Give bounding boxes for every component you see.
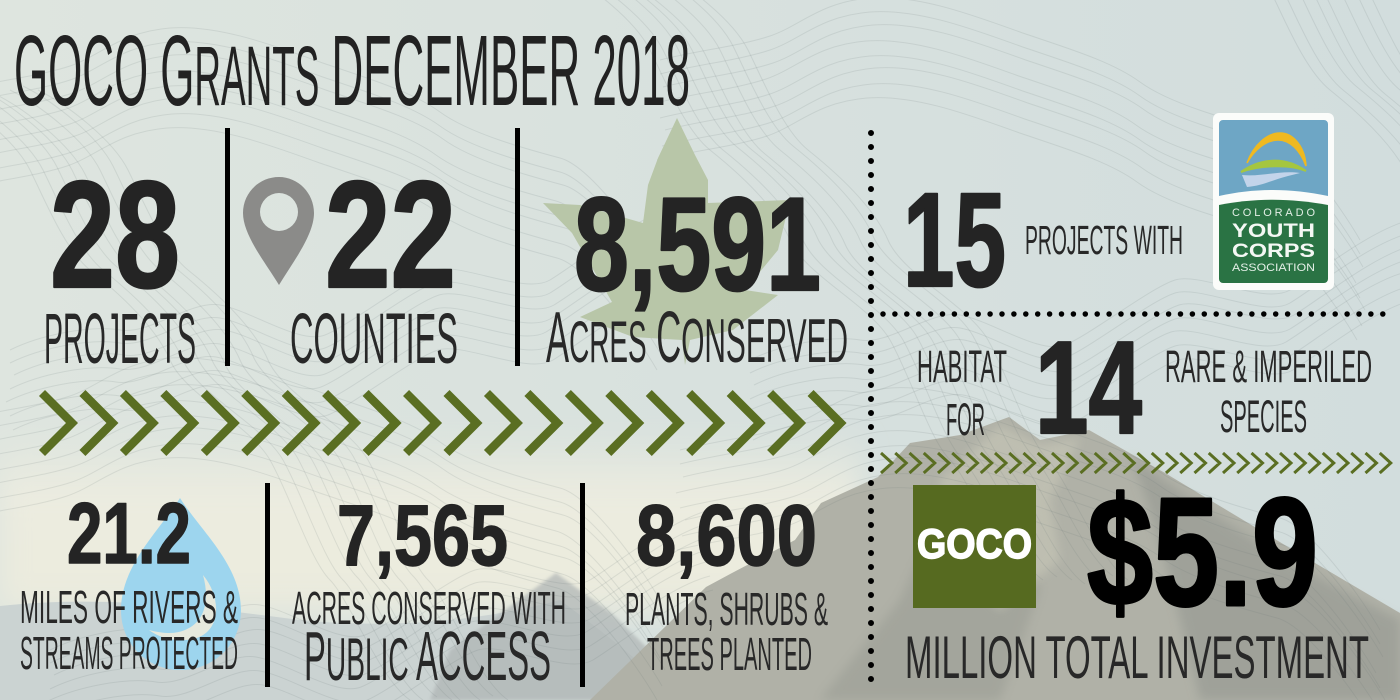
icon: map pin — [243, 177, 314, 285]
number: 21.2: 21.2 — [67, 486, 191, 582]
infographic canvas: MILES OF RIVERS & — [20, 581, 238, 633]
background: left foggy ridge — [0, 600, 680, 700]
stat: 15 projects with youth corps: PROJECTS WITH — [1025, 217, 1183, 263]
infographic canvas: PLANTS, SHRUBS & — [625, 583, 828, 635]
divider — [580, 483, 585, 687]
logo: Colorado Youth Corps Association: YOUTH — [1232, 221, 1315, 242]
divider — [515, 128, 520, 366]
background: mountain peak — [590, 417, 1400, 700]
stat: 8,600 plants: 8,600 — [636, 488, 817, 584]
logo: Colorado Youth Corps Association: COLORADO — [1232, 207, 1315, 219]
stat: 7,565 acres public access: 7,565 — [337, 488, 508, 584]
stat: $5.9 million total investment — [905, 466, 1369, 691]
infographic canvas: ACRES CONSERVED WITH — [292, 582, 566, 634]
stat: 14 rare and imperiled species: HABITAT — [917, 341, 1007, 392]
infographic canvas: TREES PLANTED — [647, 628, 812, 680]
icon: maple leaf — [543, 118, 790, 365]
small chevron arrow row — [881, 453, 1391, 473]
infographic canvas: COUNTIES — [290, 300, 458, 379]
infographic canvas: STREAMS PROTECTED — [20, 627, 238, 679]
stat: 22 counties — [243, 150, 458, 379]
background: mountain shaded faces — [820, 470, 1040, 700]
stat: 14 rare and imperiled species — [917, 314, 1372, 461]
background: small far peak — [430, 573, 690, 700]
icon: water drop — [121, 498, 241, 670]
stat: 21.2 miles of rivers — [20, 486, 241, 679]
logo: GOCO: GOCO — [917, 520, 1032, 567]
infographic canvas: PROJECTS — [44, 300, 196, 379]
stat: 8,591 acres conserved — [543, 118, 848, 378]
background: mountain lit ridge — [940, 425, 1080, 610]
stat: 28 projects — [44, 150, 196, 379]
background: mountain right shadow — [1130, 455, 1400, 700]
stat: 14 rare and imperiled species: FOR — [946, 394, 985, 445]
stat: 14 rare and imperiled species: 14 — [1035, 314, 1142, 461]
number: 22: 22 — [325, 150, 456, 320]
stat: 8,600 plants — [625, 488, 828, 680]
divider — [225, 128, 230, 366]
stat: 28 projects: 28 — [50, 150, 180, 320]
large chevron arrow row — [42, 393, 841, 453]
stat: 15 projects with youth corps: 15 — [903, 166, 1006, 315]
title: GOCO GRANTS DECEMBER 2018 — [14, 15, 690, 127]
divider — [265, 483, 270, 687]
stat: 7,565 acres public access — [292, 488, 566, 695]
stat: 7,565 acres public access: PUBLIC ACCESS — [304, 617, 551, 695]
dotted horizontal separator — [883, 311, 1387, 317]
stat: $5.9 million total investment: $5.9 — [1087, 466, 1318, 638]
dotted vertical separator — [868, 133, 874, 682]
stat: 15 projects with youth corps — [903, 113, 1334, 315]
logo: GOCO — [913, 485, 1036, 608]
logo: Colorado Youth Corps Association: ASSOCIATION — [1232, 262, 1315, 274]
logo: Colorado Youth Corps Association — [1213, 113, 1334, 290]
number: 8,591: 8,591 — [574, 171, 821, 319]
label: acres conserved: ACRES CONSERVED — [546, 298, 848, 378]
logo: Colorado Youth Corps Association: CORPS — [1232, 241, 1315, 262]
